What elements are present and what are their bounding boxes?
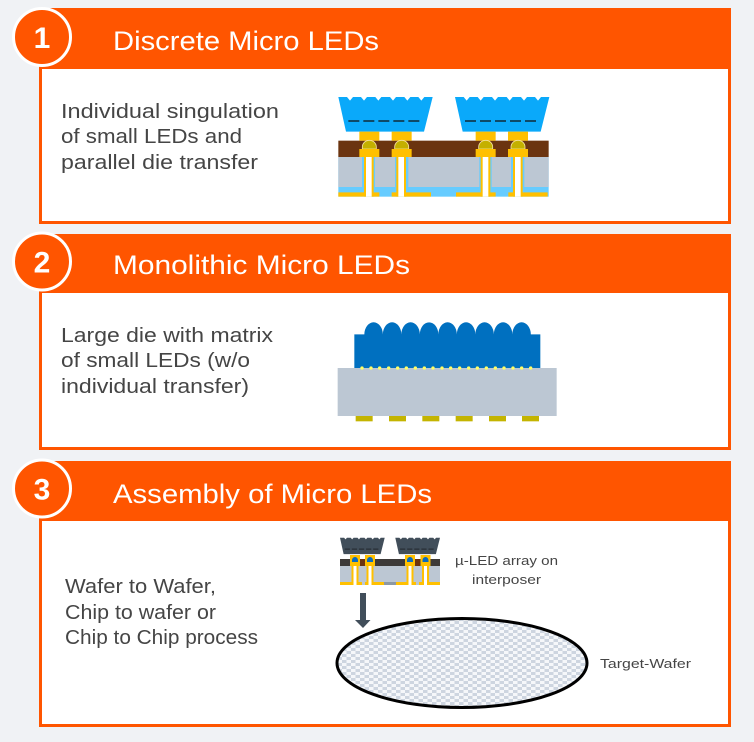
panel 3 heading: Assembly of Micro LEDs xyxy=(113,479,432,509)
panel 2 number badge: 2 xyxy=(34,246,50,280)
diagram: discrete LED chips on interposer xyxy=(338,97,549,197)
label: target wafer: Target-Wafer xyxy=(600,656,692,671)
panel 2 description: individual transfer) xyxy=(61,376,249,398)
panel 2 heading: Monolithic Micro LEDs xyxy=(113,250,410,280)
panel 3: assembly of micro LEDs xyxy=(14,460,731,727)
panel 1 description: of small LEDs and xyxy=(61,126,242,148)
panel 2 body xyxy=(42,293,728,447)
panel 3 description: Chip to Chip process xyxy=(65,627,258,649)
panel 1 heading: Discrete Micro LEDs xyxy=(113,26,379,56)
panel 3 number badge xyxy=(14,460,70,517)
panel 1 number badge: 1 xyxy=(34,22,50,55)
panel 2 frame xyxy=(39,234,731,450)
panel 3 frame xyxy=(39,461,731,727)
panel 2: monolithic micro LEDs xyxy=(14,233,731,450)
panel 1 description: Individual singulation xyxy=(61,101,279,123)
panel 1 description xyxy=(61,101,279,174)
diagram: LED array on interposer xyxy=(340,538,440,585)
arrow: down to target wafer xyxy=(355,593,370,628)
panel 3 description: Chip to wafer or xyxy=(65,602,216,624)
label: array on interposer: interposer xyxy=(472,572,542,587)
label: array on interposer: µ-LED array on xyxy=(455,553,558,568)
panel 1 number badge xyxy=(14,8,70,66)
panel 2 description: of small LEDs (w/o xyxy=(61,350,250,372)
panel 1 frame xyxy=(39,8,731,224)
diagram: monolithic LED die xyxy=(338,322,557,421)
panel 2 description: Large die with matrix xyxy=(61,325,273,347)
panel 2 number badge xyxy=(14,233,70,290)
panel 3 description: Wafer to Wafer, xyxy=(65,576,216,598)
target wafer xyxy=(337,618,587,708)
panel 1: discrete micro LEDs xyxy=(14,8,731,224)
panel 3 description xyxy=(65,576,258,649)
label: array on interposer xyxy=(455,553,558,587)
panel 1 body xyxy=(42,69,728,221)
panel 3 body xyxy=(42,521,728,724)
panel 1 description: parallel die transfer xyxy=(61,152,258,174)
panel 3 number badge: 3 xyxy=(34,474,50,506)
panel 2 description xyxy=(61,325,273,398)
